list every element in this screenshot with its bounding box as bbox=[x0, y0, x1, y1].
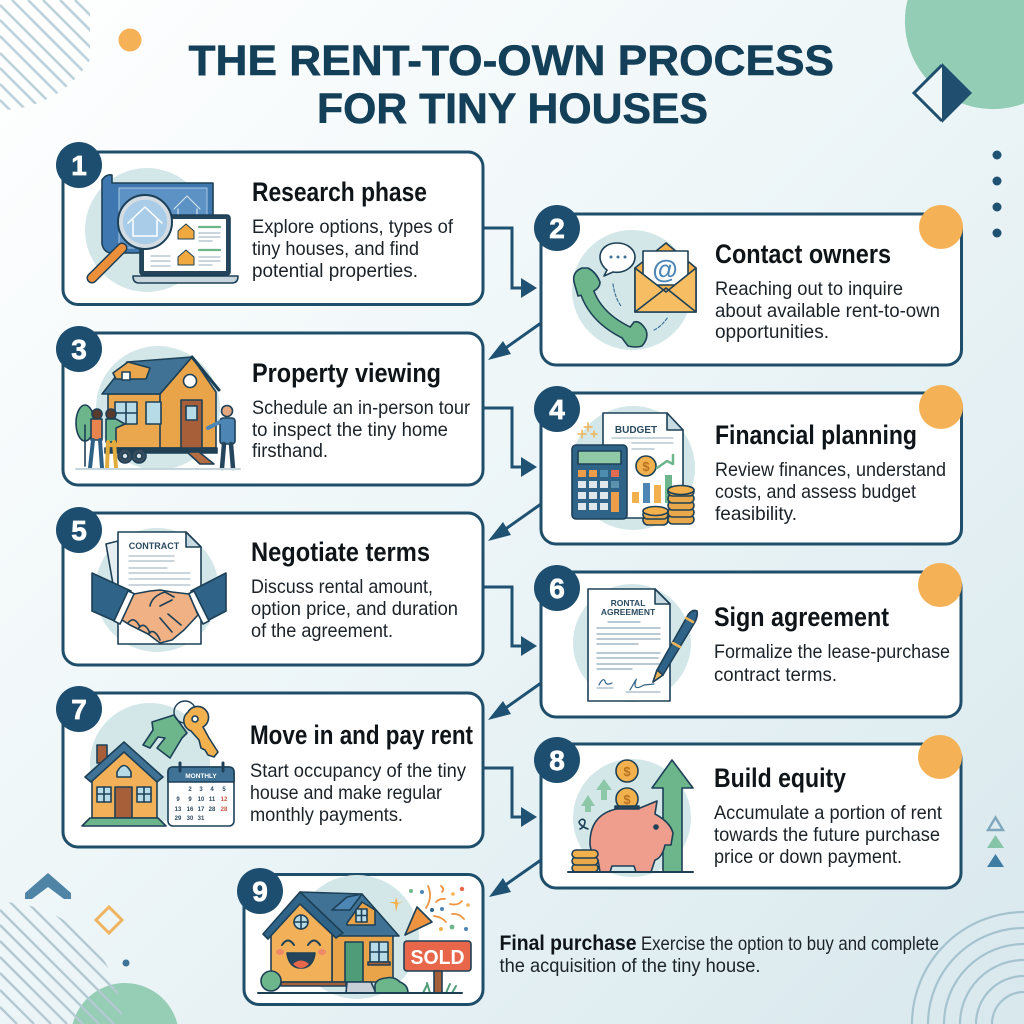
text block: final purchase: the acquisition of the tiny house. bbox=[500, 955, 760, 977]
icon: house, keys and calendar: 4 bbox=[210, 787, 214, 793]
body text: Explore options, types of bbox=[252, 216, 454, 238]
icon: house, keys and calendar: 10 bbox=[198, 797, 205, 803]
body text: Accumulate a portion of rent bbox=[714, 802, 943, 824]
icon: house, keys and calendar: MONTHLY bbox=[185, 773, 217, 780]
icon: rental agreement and pen: RONTAL bbox=[611, 598, 645, 608]
panel: step 7 move in and pay rent bbox=[56, 686, 483, 847]
body text: towards the future purchase bbox=[714, 824, 940, 846]
body text: contract terms. bbox=[714, 664, 837, 686]
icon: house, keys and calendar: 16 bbox=[187, 807, 194, 813]
body text: Schedule an in-person tour bbox=[252, 397, 470, 419]
body text: house and make regular bbox=[250, 782, 442, 804]
orange accent bbox=[919, 205, 963, 249]
body text bbox=[252, 216, 454, 282]
number badge: 3 bbox=[71, 334, 87, 365]
icon: house, keys and calendar: 11 bbox=[209, 797, 216, 803]
body text: potential properties. bbox=[252, 260, 418, 282]
number badge bbox=[56, 686, 102, 732]
body text: Start occupancy of the tiny bbox=[250, 760, 466, 782]
number badge: 2 bbox=[549, 213, 565, 244]
number badge bbox=[237, 868, 283, 914]
decoration: orange dot bbox=[118, 28, 142, 52]
heading: Build equity bbox=[714, 763, 846, 793]
panel: step 4 financial planning bbox=[534, 385, 963, 544]
icon: tiny house with people bbox=[76, 346, 240, 470]
body text: to inspect the tiny home bbox=[252, 419, 448, 441]
body text: Formalize the lease-purchase bbox=[714, 641, 950, 663]
orange accent bbox=[918, 563, 962, 607]
text block: final purchase bbox=[500, 931, 939, 977]
decoration: triangles bbox=[987, 818, 1004, 867]
body text: feasibility. bbox=[715, 503, 797, 525]
body text: tiny houses, and find bbox=[252, 238, 419, 260]
number badge bbox=[534, 565, 580, 611]
arrow: step 8 to 9 bbox=[489, 860, 541, 897]
icon: house, keys and calendar: 13 bbox=[175, 807, 182, 813]
panel: step 1 research phase bbox=[56, 142, 483, 304]
decoration: bottom-right arcs bbox=[912, 912, 1024, 1024]
icon: house, keys and calendar: 31 bbox=[198, 816, 205, 822]
icon: phone and envelope: @ bbox=[652, 254, 678, 284]
panel: step 2 contact owners bbox=[534, 205, 963, 365]
body text bbox=[252, 397, 470, 462]
icon: smiling house, party popper and sold sign: SOLD bbox=[410, 947, 464, 969]
orange accent bbox=[919, 385, 963, 429]
arrow: step 2 to 3 bbox=[488, 323, 541, 360]
number badge: 7 bbox=[71, 694, 87, 725]
icon: rental agreement and pen bbox=[573, 584, 697, 702]
number badge: 5 bbox=[71, 515, 87, 546]
icon: piggy bank and growth arrow: $ bbox=[623, 764, 631, 779]
decoration: bottom-left stripes bbox=[0, 902, 122, 1024]
arrow: step 4 to 5 bbox=[488, 504, 541, 541]
orange accent bbox=[918, 735, 962, 779]
number badge: 8 bbox=[549, 745, 565, 776]
text block: final purchase: Exercise the option to buy and complete bbox=[641, 933, 939, 955]
body text: Reaching out to inquire bbox=[715, 278, 903, 300]
decoration: split diamond bbox=[914, 63, 972, 123]
icon: house, keys and calendar: 29 bbox=[175, 816, 182, 822]
title bbox=[188, 37, 834, 133]
body text bbox=[250, 760, 466, 826]
panel: step 9 final purchase bbox=[237, 868, 483, 1004]
icon: contract and handshake bbox=[92, 528, 226, 652]
body text: costs, and assess budget bbox=[715, 481, 917, 503]
icon: blueprint, magnifier and laptop bbox=[85, 168, 238, 292]
heading: Financial planning bbox=[715, 420, 917, 450]
icon: house, keys and calendar: 3 bbox=[199, 787, 203, 793]
icon: house, keys and calendar: 28 bbox=[221, 807, 228, 813]
body text: Review finances, understand bbox=[715, 459, 946, 481]
number badge: 1 bbox=[71, 150, 87, 181]
icon: house, keys and calendar: 9 bbox=[188, 797, 192, 803]
icon: piggy bank and growth arrow bbox=[568, 759, 693, 877]
arrow: step 7 to 8 bbox=[483, 768, 537, 827]
decoration: vertical dots bbox=[992, 150, 1002, 238]
body text: Discuss rental amount, bbox=[251, 576, 433, 598]
body text: monthly payments. bbox=[250, 804, 403, 826]
title: THE RENT-TO-OWN PROCESS bbox=[188, 37, 834, 85]
icon: budget, calculator and coins: $ bbox=[642, 459, 650, 474]
icon: house, keys and calendar bbox=[82, 701, 234, 826]
body text: price or down payment. bbox=[714, 846, 902, 868]
number badge bbox=[534, 386, 580, 432]
panel: step 6 sign agreement bbox=[534, 563, 962, 717]
body text: opportunities. bbox=[715, 321, 829, 343]
icon: rental agreement and pen: AGREEMENT bbox=[601, 607, 656, 617]
panel: step 8 build equity bbox=[534, 735, 962, 888]
arrow: step 1 to 2 bbox=[483, 228, 537, 298]
number badge: 9 bbox=[252, 876, 268, 907]
number badge bbox=[56, 142, 102, 188]
number badge bbox=[56, 507, 102, 553]
text block: final purchase: Final purchase bbox=[500, 931, 637, 955]
heading: Property viewing bbox=[252, 358, 441, 388]
icon: house, keys and calendar: 2 bbox=[188, 787, 192, 793]
body text bbox=[714, 641, 950, 686]
body text bbox=[715, 459, 946, 525]
icon: budget, calculator and coins: BUDGET bbox=[615, 425, 657, 436]
icon: budget, calculator and coins bbox=[571, 406, 695, 530]
icon: house, keys and calendar: 17 bbox=[198, 807, 205, 813]
heading: Negotiate terms bbox=[251, 537, 430, 567]
icon: house, keys and calendar: 12 bbox=[221, 797, 228, 803]
number badge bbox=[534, 205, 580, 251]
decoration: small dot bbox=[122, 960, 130, 966]
heading: Contact owners bbox=[715, 239, 891, 269]
icon: house, keys and calendar: 30 bbox=[187, 816, 194, 822]
icon: smiling house, party popper and sold sign bbox=[258, 875, 471, 999]
heading: Sign agreement bbox=[714, 602, 889, 632]
number badge: 6 bbox=[549, 573, 565, 604]
icon: phone and envelope bbox=[572, 230, 696, 350]
body text bbox=[714, 802, 943, 868]
decoration: chevron bbox=[25, 873, 71, 899]
icon: house, keys and calendar: 5 bbox=[222, 787, 226, 793]
number badge bbox=[534, 737, 580, 783]
panel: step 3 property viewing bbox=[56, 326, 483, 485]
decoration: orange diamond outline bbox=[96, 907, 122, 933]
title: FOR TINY HOUSES bbox=[317, 85, 708, 133]
decoration: top-right green circle bbox=[905, 0, 1024, 109]
icon: contract and handshake: CONTRACT bbox=[129, 541, 180, 551]
decoration: bottom-left green circle bbox=[73, 983, 177, 1024]
decoration: top-left stripes bbox=[0, 0, 90, 110]
number badge bbox=[56, 326, 102, 372]
heading: Research phase bbox=[252, 177, 427, 207]
body text bbox=[715, 278, 940, 343]
arrow: step 6 to 7 bbox=[488, 683, 541, 720]
body text: about available rent-to-own bbox=[715, 300, 940, 322]
number badge: 4 bbox=[549, 394, 565, 425]
body text: firsthand. bbox=[252, 440, 328, 462]
icon: house, keys and calendar: 9 bbox=[176, 797, 180, 803]
body text: of the agreement. bbox=[251, 620, 393, 642]
arrow: step 3 to 4 bbox=[483, 408, 537, 477]
arrow: step 5 to 6 bbox=[483, 587, 537, 656]
icon: house, keys and calendar: 28 bbox=[209, 807, 216, 813]
body text bbox=[251, 576, 458, 642]
panel: step 5 negotiate terms bbox=[56, 507, 483, 665]
body text: option price, and duration bbox=[251, 598, 458, 620]
heading: Move in and pay rent bbox=[250, 720, 473, 750]
icon: piggy bank and growth arrow: $ bbox=[623, 792, 631, 807]
